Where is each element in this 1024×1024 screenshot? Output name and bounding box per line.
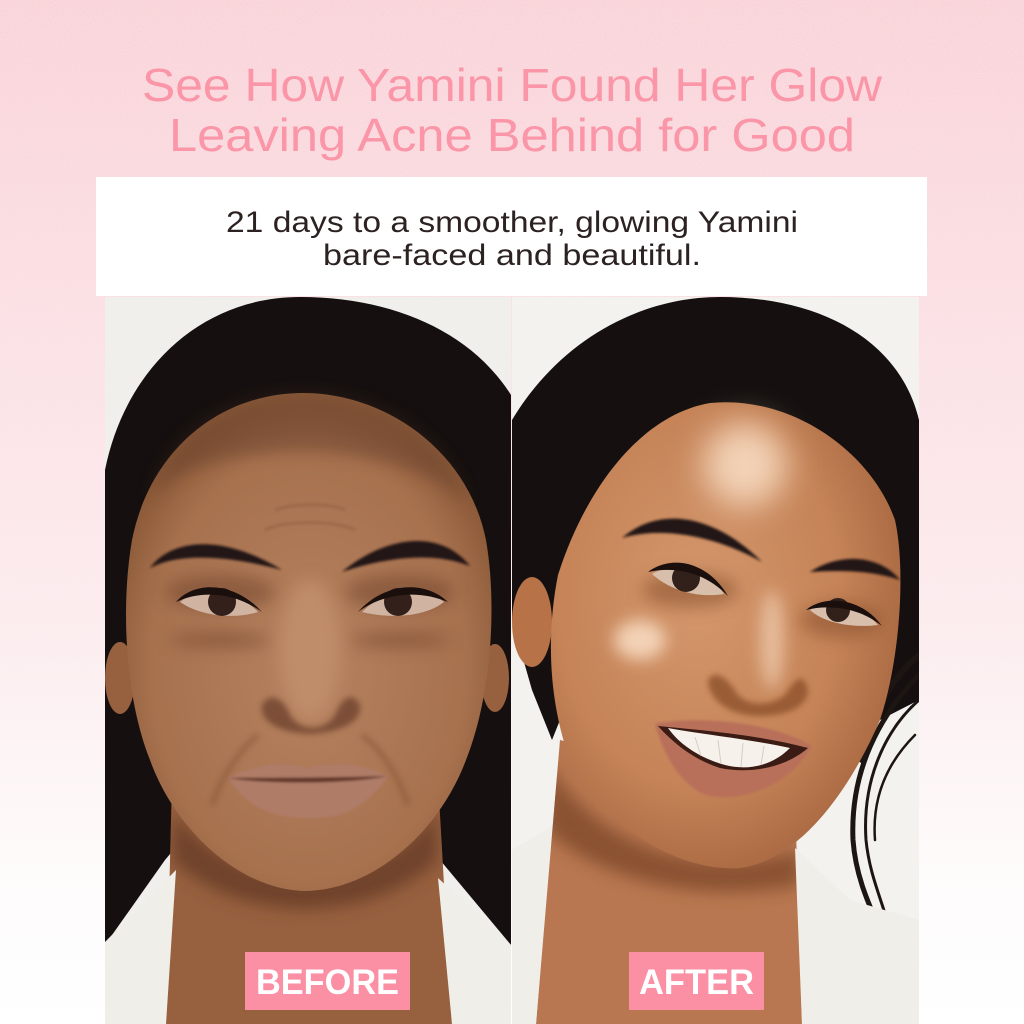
neck: before <box>166 803 452 1024</box>
label: before <box>245 952 410 1010</box>
panel: subtitle box <box>96 177 927 296</box>
label: after <box>629 952 764 1010</box>
subtitle text: bare-faced and beautiful. <box>323 239 701 272</box>
title <box>142 59 883 161</box>
eyebrows: after <box>622 519 900 580</box>
ears: before <box>105 642 509 714</box>
eyes: after <box>648 563 882 626</box>
eye shadows: after <box>642 572 884 638</box>
subtitle text <box>226 206 798 272</box>
smile: after <box>655 720 812 797</box>
smile lines: before <box>212 735 408 805</box>
face: after <box>551 402 900 868</box>
skin highlights: after <box>614 423 787 690</box>
nose: before <box>262 580 360 734</box>
eyebrows: before <box>150 541 470 572</box>
title: Leaving Acne Behind for Good <box>169 109 855 161</box>
hair: after <box>512 297 919 740</box>
robe: after <box>536 848 900 1024</box>
label: before: BEFORE <box>256 963 399 1002</box>
eyes: before <box>176 587 448 616</box>
ear: after <box>512 577 552 667</box>
loose hair strands: after <box>850 700 919 910</box>
lips: before <box>228 764 388 818</box>
panel: before photo <box>105 297 511 1024</box>
page background <box>0 0 1024 800</box>
panel: after photo <box>512 297 919 1024</box>
face: before <box>126 393 492 891</box>
neck: after <box>530 740 810 1024</box>
subtitle text: 21 days to a smoother, glowing Yamini <box>226 206 798 239</box>
robe: before <box>105 870 511 1024</box>
label: after: AFTER <box>639 963 754 1002</box>
forehead shadow and creases: before <box>150 393 468 530</box>
nose: after <box>708 675 808 716</box>
title: See How Yamini Found Her Glow <box>142 59 883 111</box>
hair: before <box>105 297 511 945</box>
eye shadows: before <box>165 574 455 648</box>
